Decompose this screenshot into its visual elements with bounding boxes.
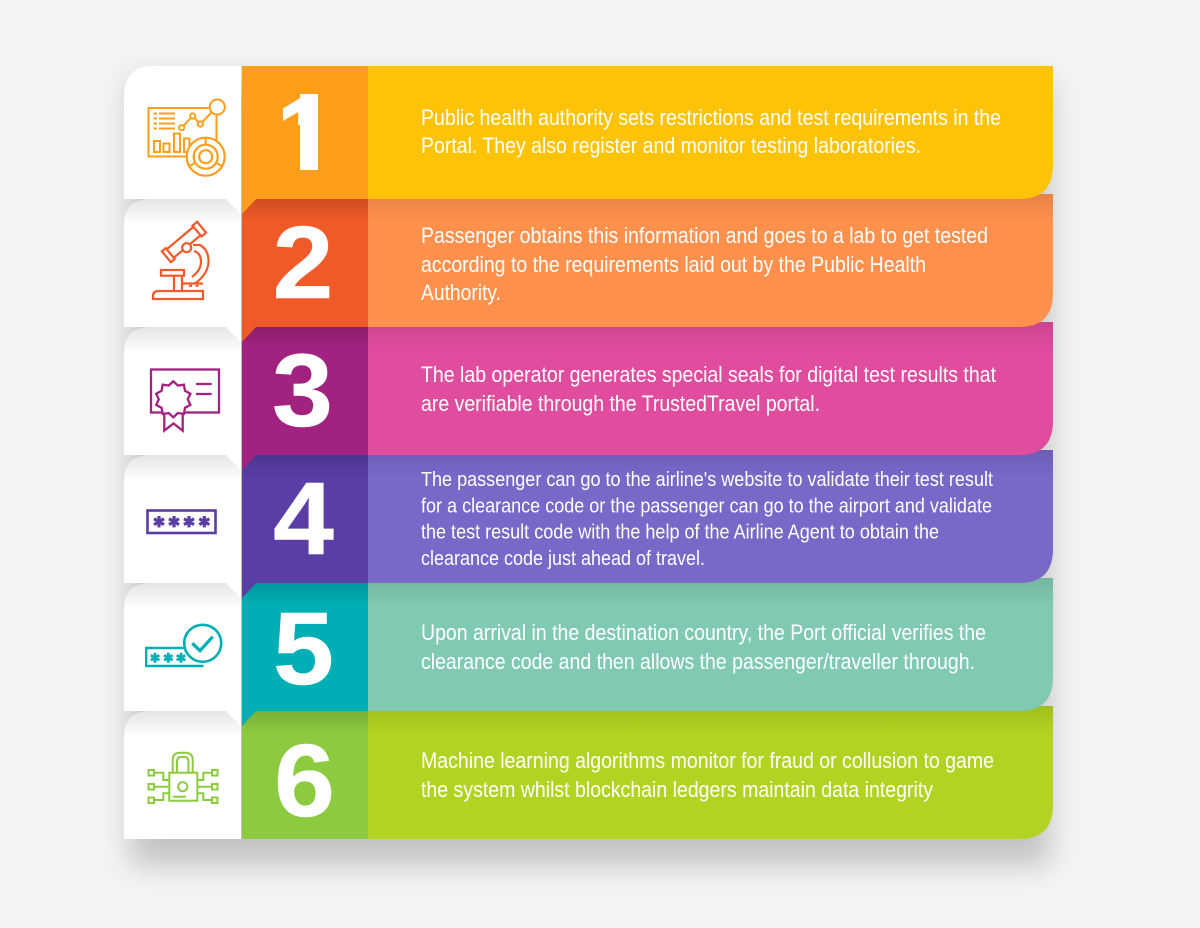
icon: certificate with seal (151, 370, 219, 431)
number 4: 4 (273, 462, 334, 576)
icon: microscope (153, 222, 209, 299)
row 1 (124, 66, 1053, 214)
text: step 6 (421, 748, 994, 802)
text: step 2: Passenger obtains this information and goes to a lab to get tested (421, 223, 988, 248)
number 6: 6 (274, 724, 335, 838)
drop shadow (130, 80, 1050, 865)
text: step 2 (421, 223, 988, 305)
infographic: six step process (116, 66, 1064, 878)
text: step 5: clearance code and then allows the passenger/traveller through. (421, 649, 975, 674)
text: step 6: the system whilst blockchain ledgers maintain data integrity (421, 777, 933, 802)
text: step 1: Public health authority sets restrictions and test requirements in the (421, 105, 1001, 130)
text: step 1 (421, 105, 1001, 158)
text: step 2: Authority. (421, 280, 501, 305)
number 2: 2 (273, 206, 333, 320)
text: step 3 (421, 362, 996, 416)
text: step 4: The passenger can go to the airline's website to validate their test result (421, 468, 993, 491)
text: step 5 (421, 620, 986, 674)
text: step 3: are verifiable through the TrustedTravel portal. (421, 391, 820, 416)
icon: circuit padlock (148, 753, 218, 803)
text: step 5: Upon arrival in the destination country, the Port official verifies the (421, 620, 986, 645)
row 3 (124, 322, 1053, 470)
text: step 4: the test result code with the help of the Airline Agent to obtain the (421, 521, 939, 544)
row 2 (124, 194, 1053, 342)
text: step 1: Portal. They also register and monitor testing laboratories. (421, 133, 921, 158)
number 3: 3 (272, 334, 333, 448)
icon: code with check mark (146, 625, 221, 666)
text: step 4: clearance code just ahead of travel. (421, 547, 705, 570)
icon: password field (148, 510, 216, 533)
text: step 6: Machine learning algorithms monitor for fraud or collusion to game (421, 748, 994, 773)
row 5 (124, 578, 1053, 726)
text: step 4: for a clearance code or the passenger can go to the airport and validate (421, 495, 992, 518)
icon: analytics dashboard (148, 100, 225, 176)
text: step 2: according to the requirements laid out by the Public Health (421, 252, 926, 277)
text: step 3: The lab operator generates special seals for digital test results that (421, 362, 996, 387)
text: step 4 (421, 468, 993, 570)
number 1: 1 (273, 78, 334, 192)
number 1 (283, 94, 318, 170)
row 4 (124, 450, 1053, 598)
row 6 (124, 706, 1053, 839)
number 5: 5 (273, 592, 334, 706)
